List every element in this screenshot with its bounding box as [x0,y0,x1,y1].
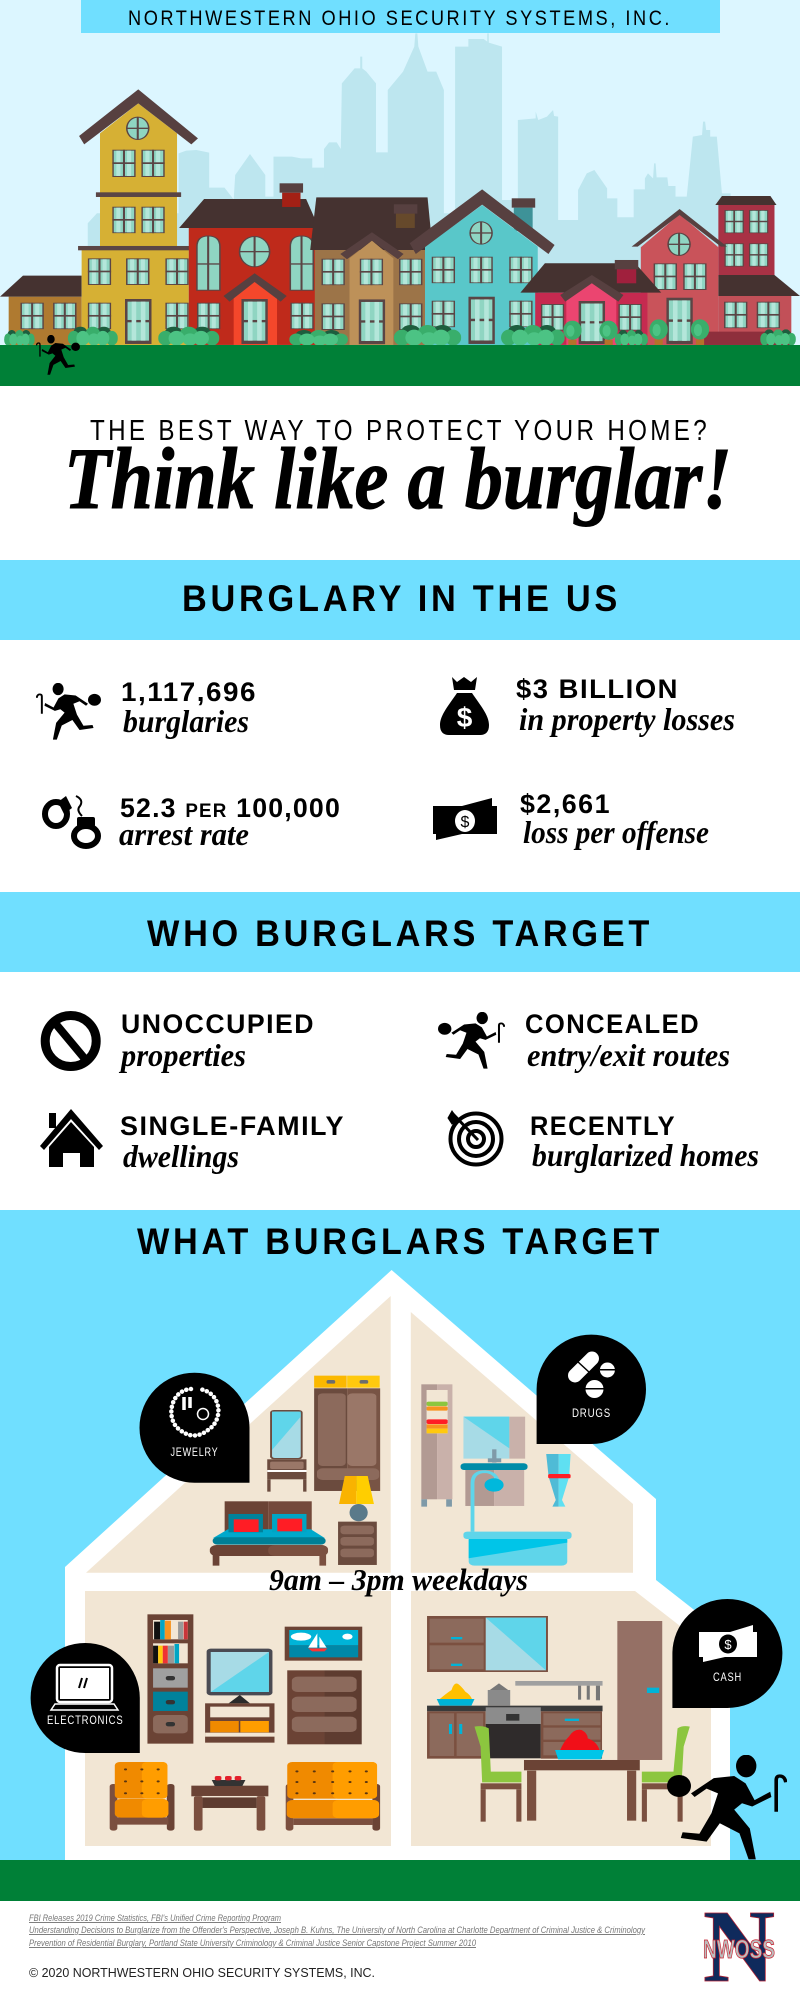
heading: WHAT BURGLARS TARGET [137,1221,663,1262]
stat: property losses: in property losses [519,701,735,737]
heading band: BURGLARY IN THE US [182,578,621,619]
item: concealed: CONCEALED [525,1009,700,1039]
icon: laptop [51,1665,118,1710]
pink house [520,260,661,345]
room: bathroom [411,1312,633,1573]
sources: FBI Releases 2019 Crime Statistics, FBI's Unified Crime Reporting Program [29,1913,281,1924]
skyline silhouette [88,33,731,333]
callout: drugs: DRUGS [572,1406,611,1420]
sources: Understanding Decisions to Burglarize from the Offender's Perspective, Joseph B. Kuhns, The University of North Carolina at Charlotte Department of Criminal Justice & Criminology [29,1925,646,1936]
stat: burglaries: burglaries [123,703,249,739]
copyright: © 2020 NORTHWESTERN OHIO SECURITY SYSTEMS, INC. [29,1965,375,1980]
panel: burglary in the US [0,560,800,852]
house outline [65,1270,730,1860]
panel background [0,1210,800,1860]
icon: burglar right [438,1012,504,1069]
item: recently [530,1111,759,1173]
stat: loss per offense: $2,661 [520,789,611,819]
icon: cash: $ [461,814,470,831]
item: concealed: entry/exit routes [527,1037,730,1073]
panel: who burglars target [0,892,800,1174]
icon: necklace [171,1389,218,1436]
company banner: NORTHWESTERN OHIO SECURITY SYSTEMS, INC. [128,6,672,30]
heading band [0,892,800,972]
logo: NWOSS: NWOSS [703,1934,775,1964]
sources: Prevention of Residential Burglary, Portland State University Criminology & Criminal Justice Senior Capstone Project Summer 2010 [29,1938,477,1949]
stat: burglaries: 1,117,696 [121,677,257,707]
room: living room [85,1591,391,1846]
callout: electronics: ELECTRONICS [47,1713,124,1727]
icon: burglar [37,683,101,740]
callout: cash: CASH [713,1670,742,1684]
heading band [0,560,800,640]
item: unoccupied: UNOCCUPIED [121,1009,315,1039]
item: single-family [120,1111,345,1174]
callout: drugs [537,1335,646,1444]
item: recently: burglarized homes [532,1137,759,1173]
icon: small burglar [36,335,80,375]
stat: property losses: $3 BILLION [516,674,679,704]
callout: jewelry: JEWELRY [170,1445,218,1459]
dark red tall house [715,196,800,345]
red house [179,183,319,345]
sources [29,1913,646,1949]
bushes [4,319,796,346]
tan house [310,197,433,345]
item: single-family: SINGLE-FAMILY [120,1111,345,1141]
stat: burglaries [121,677,257,739]
icon: pills [565,1349,615,1398]
room: kitchen [411,1591,711,1846]
item: unoccupied: properties [118,1037,246,1073]
stat: loss per offense: loss per offense [523,814,709,850]
item: recently: RECENTLY [530,1111,676,1141]
company banner [81,0,720,33]
stat: property losses [516,674,735,737]
stat: arrest rate [119,793,341,852]
callout: cash [672,1599,782,1708]
item: single-family: dwellings [123,1138,239,1174]
heading band: WHO BURGLARS TARGET [147,913,653,954]
stat: arrest rate: 52.3 PER 100,000 [120,793,341,823]
yellow tower house [78,89,198,345]
hero: town illustration [0,0,800,386]
rose house [632,209,791,345]
ground band [0,1860,800,1901]
item: unoccupied [118,1009,315,1073]
icon: large burglar [667,1755,786,1859]
panel: what burglars target [0,1210,800,1860]
time label: 9am – 3pm weekdays [269,1562,528,1597]
icon: money bag: $ [457,702,473,733]
stat: loss per offense [520,789,709,850]
callout: jewelry [140,1373,250,1483]
callout: electronics [31,1643,140,1753]
icon: house [40,1109,103,1167]
item: concealed [525,1009,730,1073]
brown house [0,276,82,345]
stat: arrest rate: arrest rate [119,816,249,852]
icon: target [448,1111,502,1164]
icon: money bag [440,677,489,735]
sky [0,0,800,346]
icon: prohibited [45,1016,96,1066]
teal house [410,189,555,345]
icon: cash [433,798,497,840]
ground [0,345,800,386]
room: bedroom [86,1296,391,1573]
icon: banknotes: $ [724,1637,732,1652]
town scene drawn in crop coordinates [0,33,800,346]
icon: handcuffs [45,796,98,846]
